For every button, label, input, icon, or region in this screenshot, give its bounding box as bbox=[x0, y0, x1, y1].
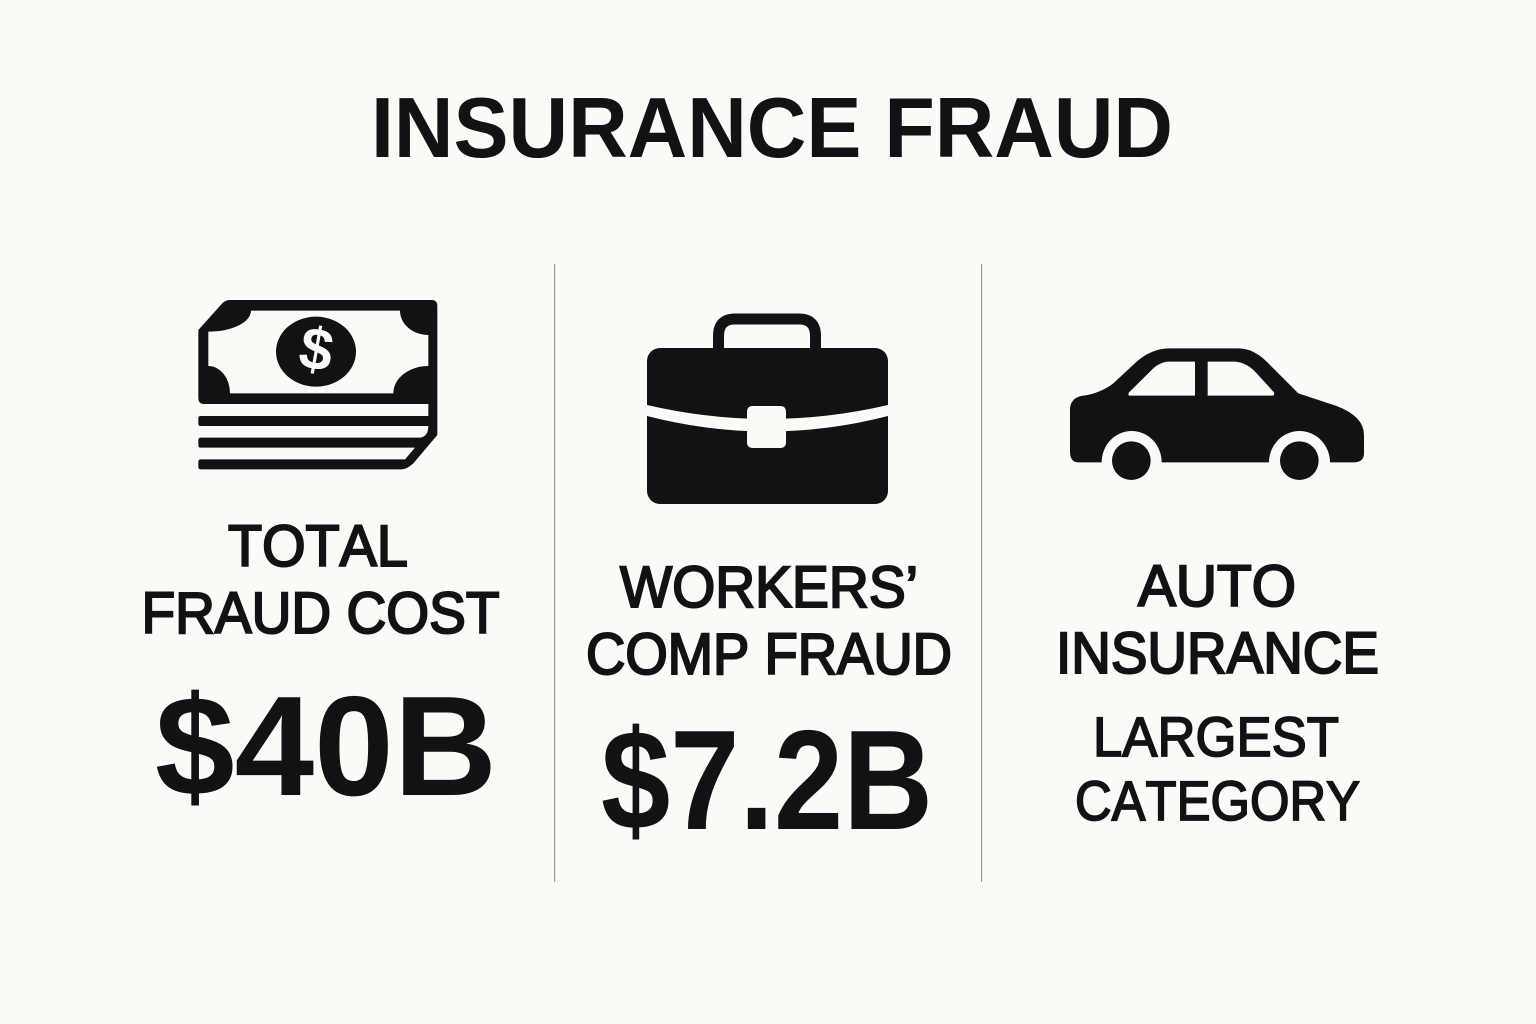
label: largest category: LARGEST bbox=[1093, 705, 1339, 768]
panel: auto insurance bbox=[1056, 348, 1379, 832]
label: total fraud cost: FRAUD COST bbox=[142, 581, 500, 646]
icon: briefcase bbox=[647, 319, 888, 504]
label: workers' comp fraud bbox=[586, 555, 952, 687]
panel: total fraud cost bbox=[142, 300, 500, 826]
value: $7.2B: $7.2B bbox=[601, 701, 933, 860]
icon: stack of money bbox=[198, 300, 437, 469]
label: workers' comp fraud: COMP FRAUD bbox=[586, 622, 952, 687]
label: total fraud cost bbox=[142, 514, 500, 646]
panel: workers' comp fraud bbox=[586, 319, 952, 860]
label: largest category bbox=[1075, 705, 1360, 832]
label: workers' comp fraud: WORKERS’ bbox=[620, 555, 918, 620]
label: total fraud cost: TOTAL bbox=[228, 514, 408, 579]
value: $40B: $40B bbox=[155, 667, 497, 826]
label: auto insurance: AUTO bbox=[1138, 554, 1296, 619]
icon: car bbox=[1070, 348, 1364, 480]
label: auto insurance: INSURANCE bbox=[1056, 621, 1379, 686]
label: auto insurance bbox=[1056, 554, 1379, 686]
icon: stack of money: $ bbox=[294, 313, 339, 385]
title: INSURANCE FRAUD bbox=[371, 81, 1173, 176]
label: largest category: CATEGORY bbox=[1075, 769, 1360, 832]
